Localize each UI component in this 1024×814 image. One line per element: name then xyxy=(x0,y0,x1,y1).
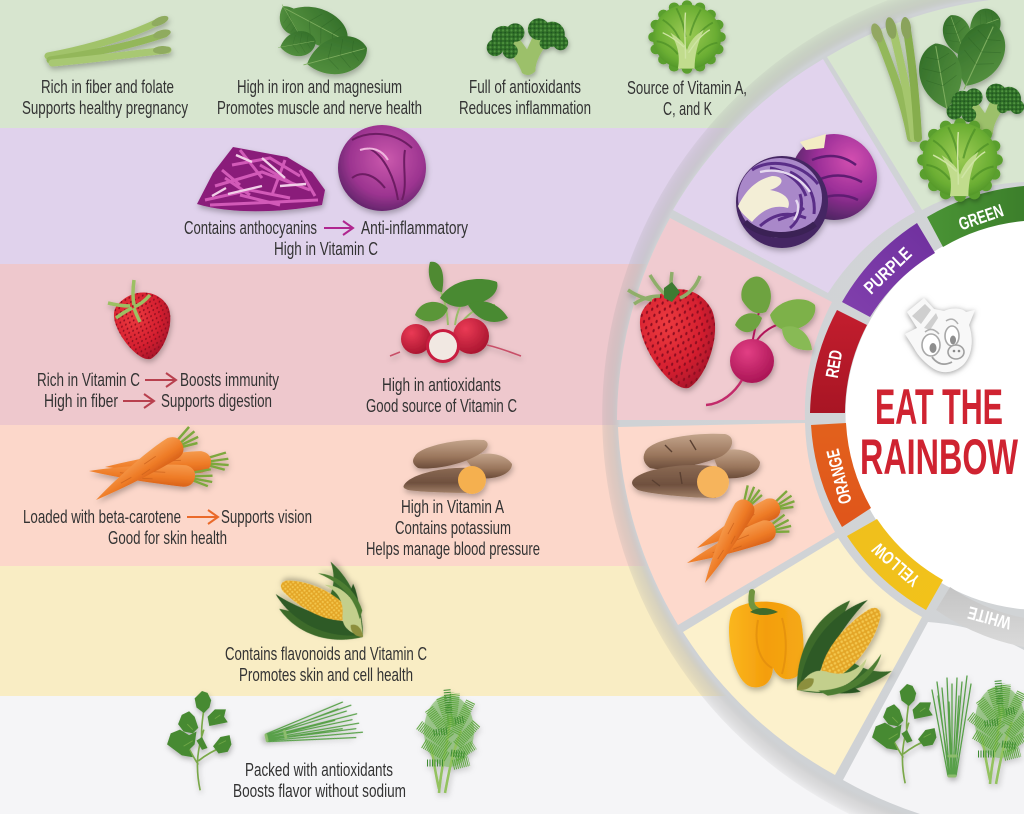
centre disc xyxy=(846,221,1024,609)
icon: wheel spinach xyxy=(915,5,1015,116)
icon: wheel red cabbage xyxy=(736,134,877,248)
text: sweet potato benefits: Contains potassium xyxy=(395,518,511,538)
text: strawberry benefits line 2: Supports digestion xyxy=(161,391,272,411)
text: cabbage benefits line 3: High in Vitamin C xyxy=(274,239,378,259)
icon: corn xyxy=(266,546,387,663)
text: corn benefits xyxy=(225,644,427,685)
text: carrot benefits line 1: Supports vision xyxy=(221,507,312,527)
label: orange xyxy=(811,423,871,527)
icon: wheel parsley xyxy=(872,684,936,783)
text: broccoli benefits: Full of antioxidants xyxy=(469,77,581,97)
text: corn benefits: Contains flavonoids and Vitamin C xyxy=(225,644,427,664)
text: strawberry benefits line 1: Rich in Vitamin C xyxy=(37,370,140,390)
icon: strawberry xyxy=(108,280,170,359)
label: white xyxy=(936,587,1024,647)
text: radish benefits: Good source of Vitamin C xyxy=(366,396,517,416)
text: radish benefits xyxy=(366,375,517,416)
panel: green xyxy=(827,0,1024,210)
text: strawberry benefits line 1: Boosts immunity xyxy=(180,370,279,390)
icon: dill xyxy=(419,689,477,793)
label: yellow xyxy=(847,519,943,610)
icon: wheel chives xyxy=(932,676,971,776)
label: red xyxy=(810,310,867,413)
icon: wheel asparagus xyxy=(869,16,918,138)
icon: red cabbage xyxy=(338,125,426,211)
icon: wheel corn xyxy=(772,587,914,725)
panel content: purple band xyxy=(184,125,468,259)
icon: broccoli xyxy=(487,18,568,75)
icon: parsley xyxy=(167,691,231,790)
icon: wheel dill xyxy=(970,680,1024,784)
text: strawberry benefits line 1 xyxy=(37,370,279,390)
text: asparagus benefits: Rich in fiber and folate xyxy=(41,77,174,97)
icon: asparagus xyxy=(48,14,172,63)
text: herb benefits xyxy=(233,760,406,801)
icon: wheel bell pepper xyxy=(729,592,803,687)
panel content: green band xyxy=(22,0,747,119)
icon: lettuce xyxy=(648,0,726,74)
icon: carrots xyxy=(88,423,229,509)
text: corn benefits: Promotes skin and cell health xyxy=(239,665,413,685)
text: broccoli benefits: Reduces inflammation xyxy=(459,98,591,118)
text: spinach benefits xyxy=(217,77,422,118)
panel content: yellow band xyxy=(225,546,427,685)
text: lettuce benefits: Source of Vitamin A, xyxy=(627,78,747,98)
icon: wheel beet xyxy=(706,277,815,405)
text: spinach benefits: High in iron and magnesium xyxy=(237,77,402,97)
text: sweet potato benefits: High in Vitamin A xyxy=(401,497,504,517)
icon: shredded cabbage xyxy=(197,147,325,211)
text: broccoli benefits xyxy=(459,77,591,118)
text: asparagus benefits: Supports healthy pregnancy xyxy=(22,98,188,118)
panel: orange xyxy=(618,423,835,625)
icon: sweet potatoes xyxy=(403,440,512,494)
icon: wheel strawberry xyxy=(628,272,715,388)
label: white: WHITE xyxy=(966,602,1013,633)
panel: white xyxy=(843,622,1024,814)
label: red: RED xyxy=(822,348,846,379)
text: herb benefits: Packed with antioxidants xyxy=(245,760,393,780)
panel content: orange band xyxy=(23,423,540,559)
icon: chives xyxy=(263,699,363,756)
label: orange: ORANGE xyxy=(823,447,856,506)
icon: wheel sweet potatoes xyxy=(632,434,760,498)
arrow: fiber to digestion xyxy=(123,394,154,408)
label: green xyxy=(927,186,1024,247)
label: green: GREEN xyxy=(956,200,1006,234)
text: strawberry benefits line 2 xyxy=(44,391,272,411)
panel content: red band xyxy=(37,262,521,416)
label: purple: PURPLE xyxy=(860,243,916,298)
text: sweet potato benefits: Helps manage blood pressure xyxy=(366,539,540,559)
text: herb benefits: Boosts flavor without sodium xyxy=(233,781,406,801)
text: sweet potato benefits xyxy=(366,497,540,559)
label: purple xyxy=(842,223,935,317)
text: carrot benefits line 2: Good for skin health xyxy=(108,528,227,548)
panel: red xyxy=(617,218,832,420)
wheel base ring xyxy=(602,0,1024,814)
arrow: beta-carotene to vision xyxy=(187,510,218,524)
text: cabbage benefits line 2: Anti-inflammatory xyxy=(361,218,468,238)
text: asparagus benefits xyxy=(22,77,188,118)
arrow: anthocyanins to anti-inflammatory xyxy=(324,221,353,235)
wheel xyxy=(602,0,1024,814)
panel content: white band xyxy=(167,689,477,801)
title xyxy=(860,379,1019,485)
text: radish benefits: High in antioxidants xyxy=(382,375,501,395)
label: yellow: YELLOW xyxy=(868,539,924,590)
text: lettuce benefits xyxy=(627,78,747,119)
icon: wheel broccoli xyxy=(947,84,1024,138)
icon: radishes xyxy=(390,262,521,363)
icon: wheel carrots xyxy=(683,483,797,588)
icon: wheel lettuce xyxy=(917,118,1003,202)
text: cabbage benefits line 1: Contains anthocyanins xyxy=(184,218,317,238)
text: carrot benefits line 1: Loaded with beta-carotene xyxy=(23,507,181,527)
logo: pig xyxy=(905,298,975,372)
text: lettuce benefits: C, and K xyxy=(663,99,712,119)
text: strawberry benefits line 2: High in fiber xyxy=(44,391,118,411)
text: spinach benefits: Promotes muscle and nerve health xyxy=(217,98,422,118)
panel: yellow xyxy=(683,538,922,775)
icon: spinach xyxy=(272,0,372,83)
panel: purple xyxy=(673,59,915,293)
arrow: vitamin C to immunity xyxy=(145,373,176,387)
